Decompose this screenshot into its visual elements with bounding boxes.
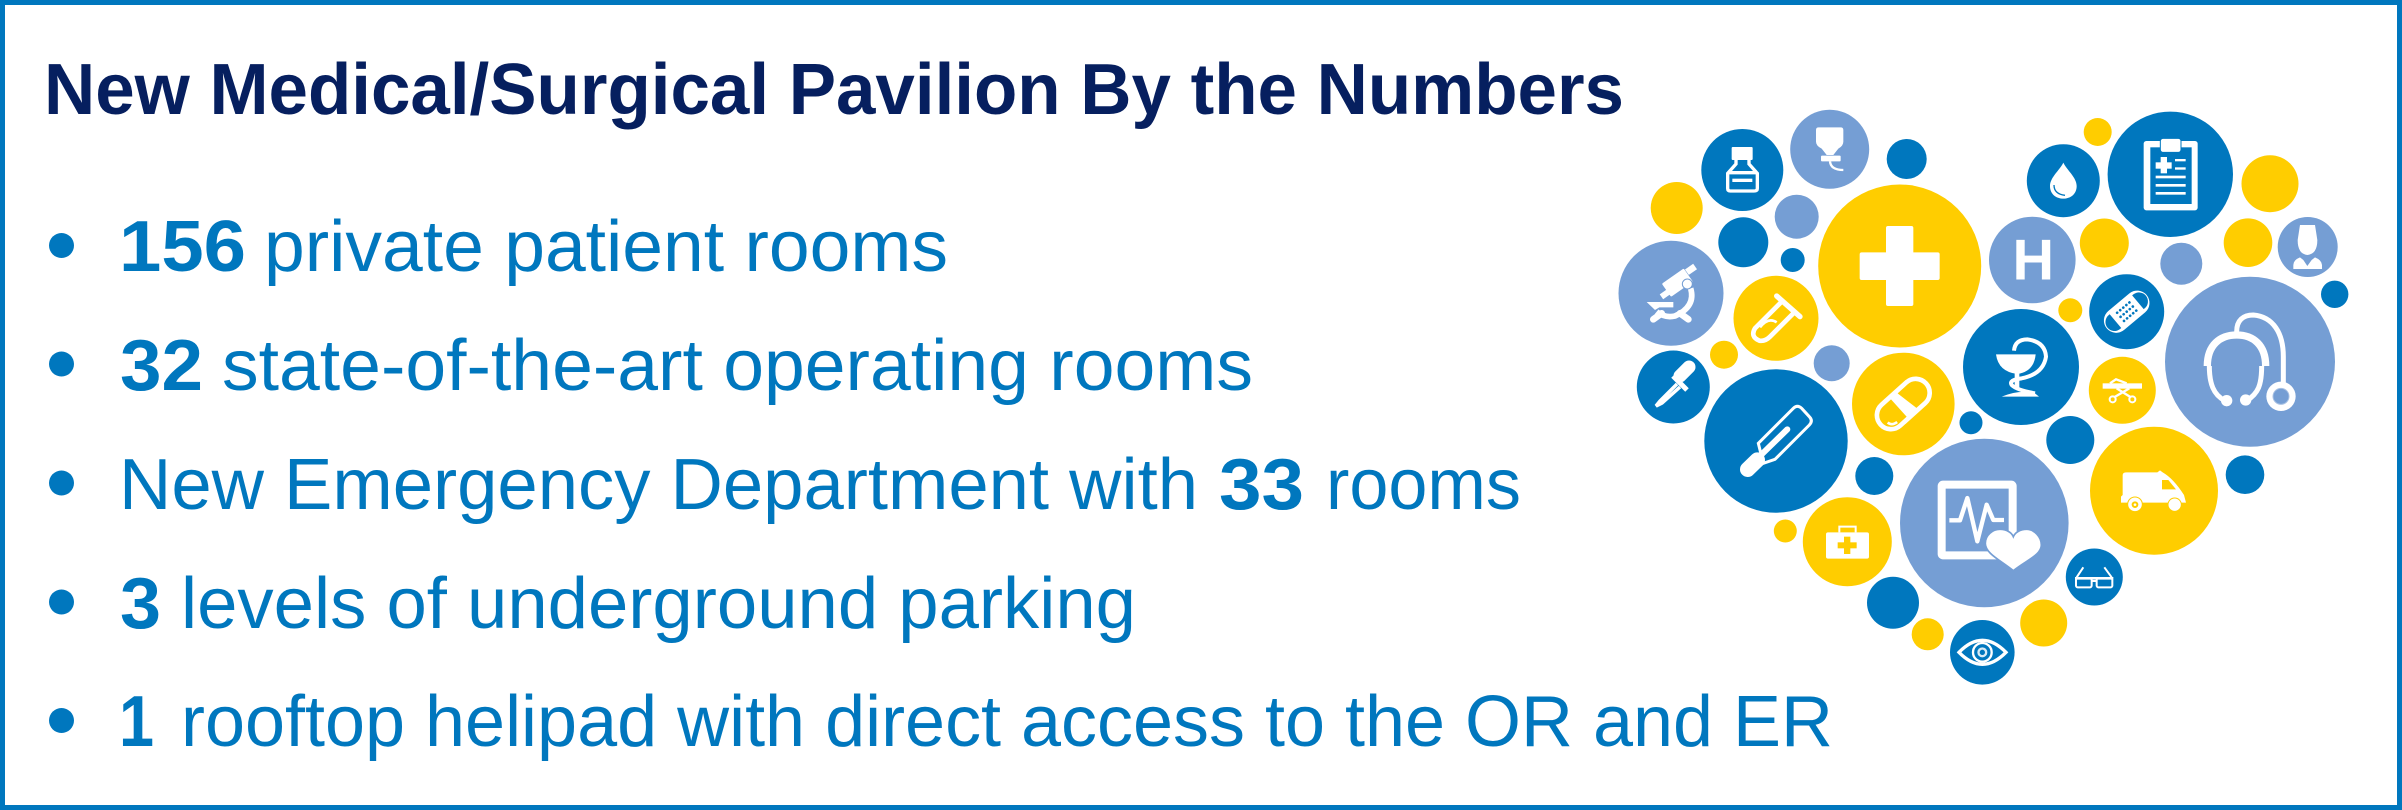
icon: medicine bottle [1701, 129, 1783, 211]
icon: microscope [1618, 241, 1724, 346]
icon: IV bag [1790, 110, 1869, 189]
heart of medical icons [1618, 110, 2348, 685]
bullet item: 32 state-of-the-art operating rooms: 32 [120, 326, 203, 406]
icon: white cross [1818, 184, 1981, 348]
plain dots filling the heart shape [1651, 118, 2348, 650]
icon: water drop [2027, 144, 2100, 217]
bullet item: New Emergency Department with 33 rooms: 33 [1219, 445, 1304, 525]
icon: clipboard [2108, 112, 2233, 237]
bullet item: 1 rooftop helipad with direct access to the OR and ER: rooftop helipad with direct access to the OR and ER [181, 682, 1833, 762]
icon: hospital H: H [2013, 229, 2054, 293]
bullet item: 156 private patient rooms: 156 [119, 207, 246, 287]
icon: ambulance van [2090, 427, 2218, 555]
bullet list [49, 207, 1833, 762]
icon: capsule pill [1852, 353, 1955, 455]
bullet item: New Emergency Department with 33 rooms: rooms [1326, 445, 1521, 525]
bullet item: 3 levels of underground parking: levels of underground parking [181, 564, 1136, 644]
icon: thermometer [1704, 369, 1848, 513]
icon: doctor [2278, 217, 2338, 277]
bullet item: 1 rooftop helipad with direct access to the OR and ER: 1 [119, 682, 154, 762]
icon: first aid kit [1803, 497, 1892, 586]
icon: dropper pipette [1637, 350, 1710, 424]
icon: heart rate monitor [1900, 439, 2069, 607]
bullet item: 32 state-of-the-art operating rooms: state-of-the-art operating rooms [222, 326, 1253, 406]
icon: bandage [2089, 274, 2164, 349]
icon: hospital H [1989, 217, 2076, 303]
icon: eye [1950, 620, 2015, 685]
icon: stretcher [2089, 357, 2156, 424]
icon: test tube [1734, 276, 1818, 361]
bullet item: 3 levels of underground parking: 3 [120, 564, 161, 644]
bullet item: New Emergency Department with 33 rooms: New Emergency Department with [119, 445, 1198, 525]
bullet item: 156 private patient rooms: private patient rooms [264, 207, 948, 287]
icon: glasses [2066, 548, 2123, 606]
icon: stethoscope [2165, 277, 2335, 447]
icon: bowl of hygieia [1963, 309, 2079, 425]
title: New Medical/Surgical Pavilion By the Numbers [44, 50, 1624, 130]
